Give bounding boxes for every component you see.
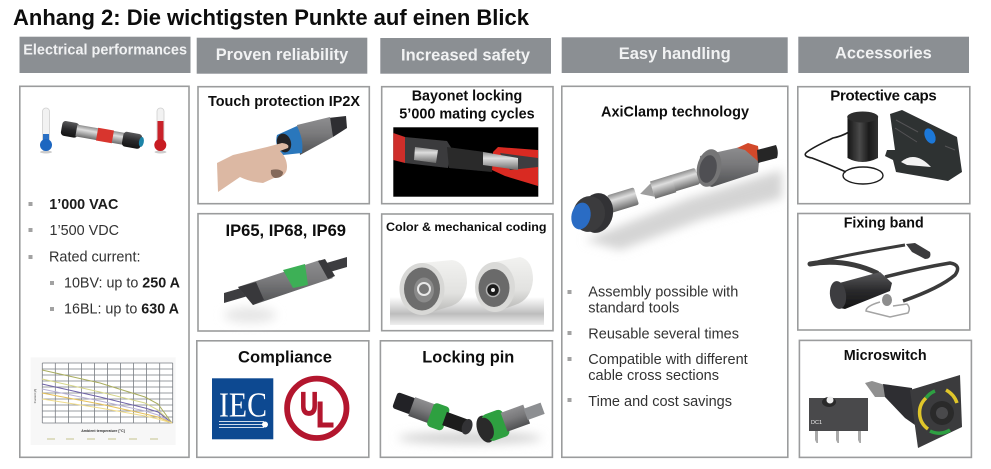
panel: fixing band — [798, 214, 970, 330]
heading: Bayonet locking — [412, 88, 522, 105]
bullet list: ratings: 16BL: up to 630 A — [64, 301, 179, 317]
header: Proven reliability: Proven reliability — [216, 45, 349, 64]
chart: current vs ambient temperature: Current [A] — [33, 389, 37, 403]
heading: AxiClamp technology — [601, 104, 750, 121]
heading: Compliance — [238, 347, 332, 366]
header: Accessories: Accessories — [835, 44, 932, 63]
header: Increased safety: Increased safety — [401, 46, 531, 65]
bullet list: ratings — [28, 197, 180, 317]
heading: Color & mechanical coding — [386, 220, 546, 234]
chart: current vs ambient temperature — [31, 357, 176, 445]
logo: UL: L — [316, 394, 334, 435]
image: AxiClamp exploded view — [569, 143, 782, 250]
bullet list: AxiClamp benefits: Assembly possible with — [588, 285, 738, 301]
header: Electrical performances: Electrical performances — [23, 42, 187, 58]
panel: compliance — [197, 341, 369, 457]
logo: UL: U — [300, 386, 318, 422]
bullet list: ratings: 1’000 VAC — [49, 197, 119, 213]
bullet list: AxiClamp benefits — [568, 285, 748, 410]
image: black mounting plate — [885, 110, 962, 181]
image: sealed connector — [224, 257, 347, 323]
icon: cold thermometer — [40, 108, 52, 154]
panel: touch protection — [198, 87, 369, 204]
sub-heading: 5’000 mating cycles — [399, 105, 535, 122]
panel: microswitch — [799, 340, 971, 457]
image: pin connectors — [390, 389, 547, 445]
header: Electrical performances — [20, 37, 190, 73]
image: microswitch — [809, 396, 868, 443]
bullet list: AxiClamp benefits: Reusable several times — [588, 326, 739, 342]
logo: IEC — [212, 378, 273, 439]
image: connector and finger — [217, 116, 347, 192]
panel: ingress protection — [198, 214, 369, 331]
panel: bayonet locking — [382, 87, 553, 204]
bullet list: AxiClamp benefits: standard tools — [588, 301, 679, 317]
logo: UL — [287, 379, 346, 438]
panel: colour and mechanical coding — [382, 214, 553, 331]
header: Increased safety — [380, 38, 551, 74]
title: Anhang 2: Die wichtigsten Punkte auf einen Blick — [13, 5, 530, 30]
bullet list: AxiClamp benefits: Compatible with different — [588, 352, 748, 368]
header: Easy handling: Easy handling — [619, 44, 731, 63]
icon: hot thermometer — [154, 108, 166, 154]
image: switch with panel mount — [865, 375, 962, 448]
image: coded connector faces — [390, 257, 544, 325]
heading: Microswitch — [844, 347, 927, 364]
image: cap on fixing band — [809, 243, 958, 317]
header: Accessories — [798, 37, 969, 73]
image: bayonet mechanism — [393, 127, 538, 197]
panel: easy handling — [562, 86, 788, 457]
heading: Locking pin — [422, 348, 514, 367]
heading: IP65, IP68, IP69 — [226, 222, 346, 240]
panel: locking pin — [380, 341, 552, 457]
bullet list: AxiClamp benefits: cable cross sections — [588, 368, 719, 384]
bullet list: ratings: Rated current: — [49, 250, 140, 266]
header: Easy handling — [562, 37, 788, 73]
bullet list: ratings: 1’500 VDC — [50, 223, 119, 239]
image: microswitch: DC1 — [811, 420, 822, 426]
panel: protective caps — [798, 87, 970, 204]
logo: IEC: IEC — [219, 386, 267, 424]
heading: Protective caps — [830, 88, 937, 105]
header: Proven reliability — [197, 38, 367, 74]
image: cap with cord — [805, 112, 883, 184]
icon: connector — [60, 120, 145, 150]
bullet list: ratings: 10BV: up to 250 A — [64, 275, 180, 291]
panel: electrical performances — [20, 86, 189, 457]
heading: Fixing band — [844, 214, 924, 231]
bullet list: AxiClamp benefits: Time and cost savings — [588, 394, 732, 410]
heading: Touch protection IP2X — [208, 93, 360, 110]
chart: current vs ambient temperature: Ambient temperature [°C] — [81, 429, 125, 433]
